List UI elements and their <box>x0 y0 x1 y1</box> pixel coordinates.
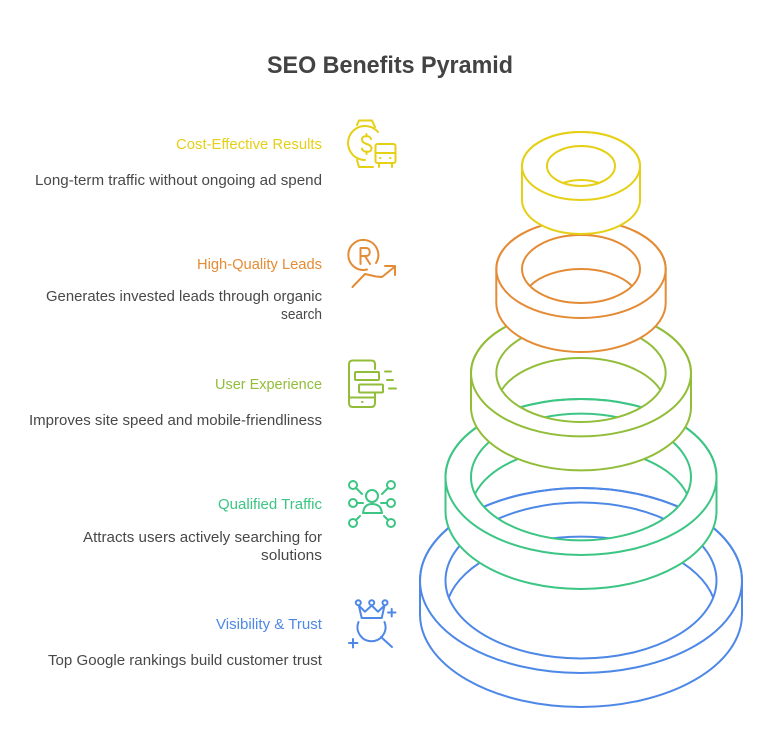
icon: phone with message bars <box>349 360 396 407</box>
block: High-Quality Leads <box>46 256 322 323</box>
description: leads: search <box>281 306 322 323</box>
heading: High-Quality Leads: High-Quality Leads <box>197 256 322 273</box>
tier: orange ring <box>496 220 666 352</box>
description: visibility: Top Google rankings build customer trust <box>48 652 323 669</box>
description: cost: Long-term traffic without ongoing ad spend <box>35 172 322 189</box>
tier: blue ring <box>420 488 742 707</box>
icon: registered mark with rising arrow <box>348 240 395 287</box>
tier: yellow ring <box>522 132 640 234</box>
icon: crown over magnifier <box>349 600 396 648</box>
description: traffic <box>83 529 322 564</box>
description: experience: Improves site speed and mobile-friendliness <box>29 412 322 429</box>
heading: Visibility & Trust: Visibility & Trust <box>216 616 323 633</box>
description: traffic: Attracts users actively searching for <box>83 529 322 546</box>
heading: User Experience: User Experience <box>215 376 322 393</box>
description: leads: Generates invested leads through organic <box>46 288 322 305</box>
description: traffic: solutions <box>261 547 322 564</box>
block: Qualified Traffic <box>83 496 322 564</box>
icon: user network <box>349 481 395 527</box>
icon: watch with dollar and card <box>348 120 396 167</box>
description: leads <box>46 288 322 323</box>
heading: Cost-Effective Results: Cost-Effective Results <box>176 136 322 153</box>
title: SEO Benefits Pyramid <box>267 52 513 79</box>
tier: green ring <box>446 399 716 589</box>
block: User Experience <box>29 376 322 429</box>
block: Visibility & Trust <box>48 616 323 669</box>
tier: olive ring <box>471 310 691 470</box>
block: Cost-Effective Results <box>35 136 322 189</box>
heading: Qualified Traffic: Qualified Traffic <box>218 496 322 513</box>
pyramid chart <box>420 132 742 707</box>
